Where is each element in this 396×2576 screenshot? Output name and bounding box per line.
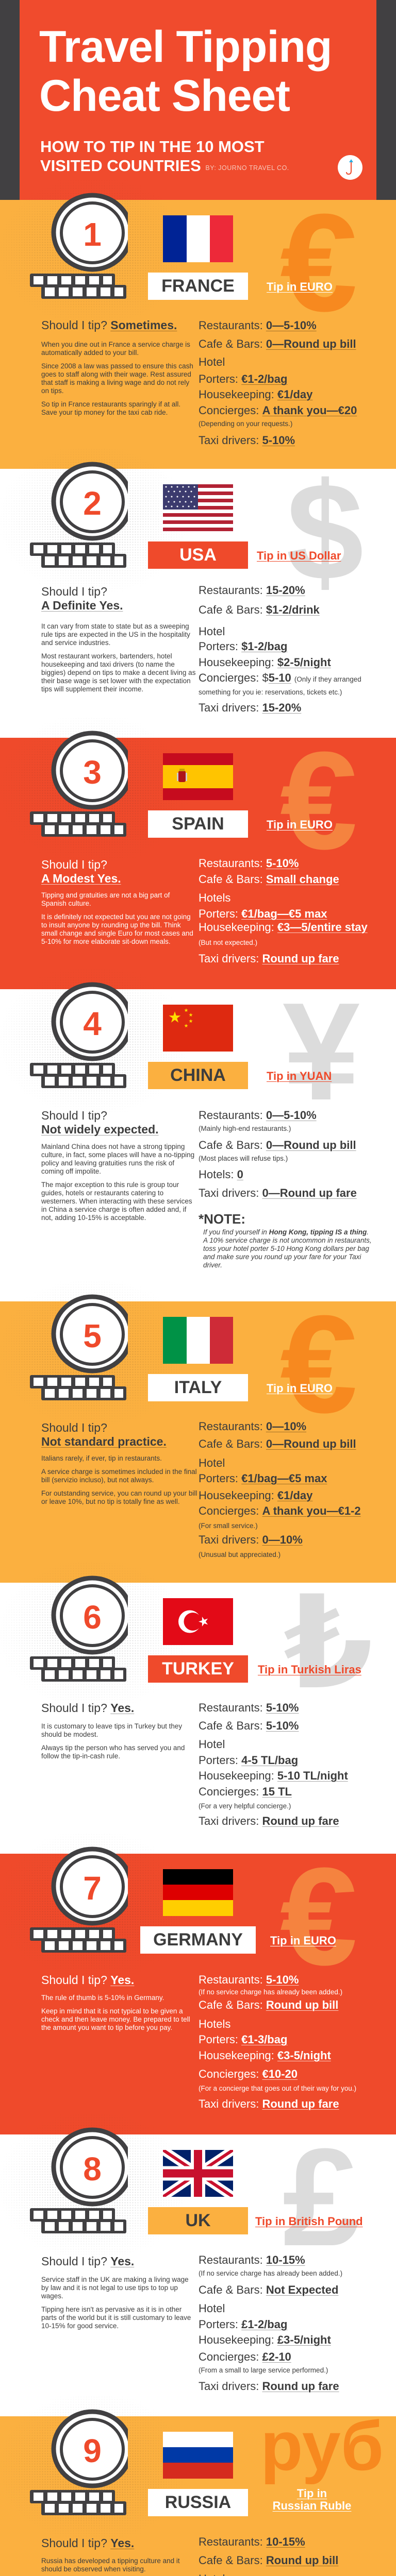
- panel: UK: Hotel: [199, 2302, 225, 2315]
- should I tip: [41, 858, 121, 885]
- panel: UK: Cafe & Bars: Not Expected: [199, 2283, 338, 2296]
- panel: France: Housekeeping: €1/day: [199, 388, 312, 401]
- tip currency: Tip in US Dollar: [257, 549, 341, 562]
- description: It is definitely not expected but you are not going to insult anyone by rounding up the bill. Think small change and single Euro for most cases and 5-10% for more elaborate sit-down meals.: [41, 913, 193, 945]
- should I tip: [41, 1109, 159, 1136]
- label: USA: [179, 545, 217, 565]
- flag: UK: [163, 2150, 233, 2197]
- icon: coin 8: [30, 2128, 128, 2233]
- panel: Italy: Porters: €1/bag—€5 max: [199, 1472, 327, 1485]
- panel: France: Taxi drivers: 5-10%: [199, 434, 295, 447]
- currency symbol euro: €: [280, 185, 357, 341]
- label: [148, 2207, 248, 2234]
- should I tip: A Definite Yes.: [41, 599, 123, 612]
- icon: coin 2: 2: [83, 485, 102, 522]
- description: The rule of thumb is 5-10% in Germany.: [41, 1994, 164, 2002]
- icon: coin 1: [30, 193, 128, 299]
- should I tip: Should I tip?: [41, 858, 107, 871]
- icon: coin 9: 9: [83, 2432, 102, 2469]
- panel: Turkey: Cafe & Bars: 5-10%: [199, 1719, 299, 1732]
- description: Since 2008 a law was passed to ensure this cash goes to staff along with their wage. Rest assured that staff is making a living wage and do not rely on tips.: [41, 362, 193, 395]
- description: [41, 1994, 190, 2031]
- panel: France: Concierges: A thank you—€20: [199, 404, 357, 417]
- tipping rates: [199, 1973, 356, 2110]
- panel: UK: Taxi drivers: Round up fare: [199, 2380, 339, 2393]
- should I tip: Should I tip? Yes.: [41, 1701, 134, 1715]
- icon: coin 2: [30, 462, 128, 568]
- panel: Italy: (Unusual but appreciated.): [199, 1551, 280, 1558]
- icon: coin 9: [29, 2409, 128, 2517]
- description: Service staff in the UK are making a living wage by law and it is not legal to use tips to top up wages.: [41, 2276, 189, 2300]
- panel: Italy: Cafe & Bars: 0—Round up bill: [199, 1437, 356, 1450]
- flag: Russia: [163, 2432, 233, 2479]
- description: [41, 341, 193, 416]
- panel: UK: Porters: £1-2/bag: [199, 2318, 287, 2331]
- panel: UK: (From a small to large service performed.): [199, 2366, 328, 2374]
- should I tip: Should I tip? Sometimes.: [41, 318, 177, 332]
- panel: Turkey: Taxi drivers: Round up fare: [199, 1815, 339, 1827]
- currency symbol yuan: ¥: [283, 974, 360, 1129]
- currency symbol euro: €: [280, 1287, 357, 1442]
- currency symbol lira: ₺: [284, 1568, 373, 1718]
- panel: USA: Restaurants: 15-20%: [199, 584, 305, 597]
- currency symbol euro: €: [280, 723, 357, 878]
- description: Always tip the person who has served you and follow the tip-in-cash rule.: [41, 1744, 185, 1760]
- description: A service charge is sometimes included in the final bill (servizio incluso), but not always.: [41, 1468, 197, 1484]
- panel: China: (Most places will refuse tips.): [199, 1155, 288, 1162]
- panel: Russia: Cafe & Bars: Round up bill: [199, 2554, 338, 2567]
- tipping rates: [0, 2134, 396, 2135]
- panel: UK: [11, 2123, 363, 2393]
- should I tip: Should I tip?: [41, 585, 107, 598]
- should I tip: Should I tip? Yes.: [41, 2536, 134, 2550]
- description: [41, 2276, 196, 2335]
- should I tip: A Modest Yes.: [41, 872, 121, 885]
- tipping rates: [199, 1420, 361, 1558]
- currency symbol ruble: руб: [260, 2407, 384, 2485]
- should I tip: [41, 585, 123, 612]
- flag: Turkey: [163, 1598, 233, 1645]
- flag: Spain: [163, 753, 233, 800]
- icon: coin 3: [30, 731, 128, 837]
- panel: UK: (If no service charge has already been added.): [199, 2269, 342, 2277]
- panel: China: [11, 978, 371, 1267]
- should I tip: Should I tip?: [41, 1109, 107, 1122]
- label: [148, 273, 248, 300]
- subtitle: [40, 138, 289, 175]
- panel: Italy: Housekeeping: €1/day: [199, 1489, 312, 1502]
- panel: Germany: Taxi drivers: Round up fare: [199, 2097, 339, 2110]
- description: The major exception to this rule is group tour guides, hotels or restaurants catering to westerners. When interacting with these services in China a service charge is often added and, if not, adding 10-15% is acceptable.: [41, 1181, 192, 1222]
- label: ITALY: [174, 1378, 222, 1397]
- label: SPAIN: [172, 814, 224, 834]
- panel: Germany: Hotels: [199, 2018, 230, 2030]
- header: [0, 0, 396, 200]
- description: Keep in mind that it is not typical to be given a check and then leave money. Be prepared to tell the amount you want to tip before you pay.: [41, 2007, 190, 2031]
- description: Russia has developed a tipping culture and it should be observed when visiting.: [41, 2557, 180, 2573]
- title: Travel Tipping: [39, 22, 332, 72]
- icon: coin 6: 6: [83, 1599, 102, 1636]
- description: [41, 1454, 197, 1505]
- flag: USA: [163, 484, 233, 531]
- tip currency: [268, 2487, 356, 2512]
- tipping rates: [199, 584, 361, 714]
- label: TURKEY: [162, 1659, 234, 1679]
- icon: coin 7: 7: [83, 1870, 102, 1907]
- tipping rates: [199, 319, 357, 447]
- description: Most restaurant workers, bartenders, hotel housekeeping and taxi drivers (to name the biggies) depend on tips to make a decent living as their base wage is set lower with the expectation tips will supplement their income.: [41, 652, 195, 693]
- tip currency: Tip in EURO: [267, 818, 333, 831]
- panel: France: Porters: €1-2/bag: [199, 372, 287, 385]
- panel: Spain: Porters: €1/bag—€5 max: [199, 907, 327, 920]
- panel: China: Cafe & Bars: 0—Round up bill: [199, 1139, 356, 1151]
- panel: France: Cafe & Bars: 0—Round up bill: [199, 337, 356, 350]
- panel: France: (Depending on your requests.): [199, 420, 292, 428]
- label: RUSSIA: [165, 2493, 231, 2512]
- tipping rates: [0, 2416, 396, 2417]
- description: Mainland China does not have a strong tipping culture, in fact, some places will have a no-tipping policy and leaving gratuities runs the risk of coming off impolite.: [41, 1143, 194, 1175]
- tipping rates: [199, 857, 368, 965]
- callout: Hong Kong note: If you find yourself in Hong Kong, tipping IS a thing. A 10% service charge is not uncommon in restaurants, toss your hotel porter 5-10 Hong Kong dollars per bag and make sure you round up your fare for your Taxi driver.: [203, 1228, 372, 1269]
- panel: Germany: (For a concierge that goes out of their way for you.): [199, 2084, 356, 2092]
- label: [148, 1655, 248, 1683]
- currency symbol dollar: $: [286, 454, 364, 609]
- icon: coin 6: [30, 1575, 128, 1682]
- panel: Germany: Cafe & Bars: Round up bill: [199, 1998, 338, 2011]
- panel: Italy: (For small service.): [199, 1522, 258, 1530]
- panel: China: Restaurants: 0—5-10%: [199, 1109, 317, 1122]
- title: [39, 22, 332, 121]
- panel: USA: Hotel: [199, 625, 225, 638]
- should I tip: Should I tip?: [41, 1421, 107, 1434]
- tipping rates: [199, 1109, 357, 1199]
- icon: coin 5: 5: [83, 1317, 102, 1354]
- tip currency: Tip in EURO: [270, 1934, 336, 1947]
- description: [41, 891, 193, 945]
- icon: coin 7: [30, 1846, 128, 1953]
- should I tip: [41, 1421, 167, 1448]
- panel: Italy: [0, 1301, 396, 1583]
- panel: France: Restaurants: 0—5-10%: [199, 319, 317, 332]
- panel: USA: Taxi drivers: 15-20%: [199, 701, 301, 714]
- icon: journo logo: [338, 155, 362, 180]
- label: [140, 1926, 256, 1954]
- callout: Hong Kong note: [199, 1211, 372, 1269]
- label: [148, 810, 248, 838]
- panel: UK: Concierges: £2-10: [199, 2350, 291, 2363]
- tip currency: Tip in EURO: [267, 1382, 333, 1395]
- description: [41, 622, 195, 693]
- panel: Spain: Housekeeping: €3—5/entire stay: [199, 921, 368, 934]
- tipping rates: [199, 1701, 348, 1827]
- description: When you dine out in France a service charge is automatically added to your bill.: [41, 341, 190, 357]
- panel: USA: something for you ie: reservations, tickets etc.): [199, 688, 342, 696]
- panel: France: Hotel: [199, 355, 225, 368]
- should I tip: Not standard practice.: [41, 1435, 167, 1448]
- currency symbol euro: €: [280, 1839, 357, 1994]
- panel: Spain: Taxi drivers: Round up fare: [199, 952, 339, 965]
- panel: Italy: Concierges: A thank you—€1-2: [199, 1504, 361, 1517]
- tip currency: Tip in British Pound: [255, 2215, 363, 2228]
- label: GERMANY: [153, 1930, 243, 1950]
- panel: Turkey: Restaurants: 5-10%: [199, 1701, 299, 1714]
- icon: coin 8: 8: [83, 2150, 102, 2188]
- tip currency: Russian Ruble: [273, 2499, 351, 2512]
- icon: coin 5: [30, 1294, 128, 1400]
- tip currency: Tip in EURO: [267, 280, 333, 293]
- panel: France: [0, 200, 396, 469]
- icon: coin 3: 3: [83, 754, 102, 791]
- panel: Russia: [0, 2416, 396, 2576]
- should I tip: Should I tip? Yes.: [41, 2255, 134, 2268]
- label: [148, 2489, 248, 2516]
- panel: USA: Concierges: $5-10 (Only if they arranged: [199, 671, 361, 684]
- currency symbol pound: £: [283, 2120, 360, 2275]
- panel: USA: Porters: $1-2/bag: [199, 640, 287, 653]
- panel: Spain: (But not expected.): [199, 939, 257, 946]
- panel: Italy: Taxi drivers: 0—10%: [199, 1533, 303, 1546]
- subtitle: VISITED COUNTRIES BY: JOURNO TRAVEL CO.: [40, 157, 289, 175]
- panel: Spain: [0, 738, 396, 989]
- panel: Russia: Restaurants: 10-15%: [199, 2535, 305, 2548]
- description: [41, 1722, 185, 1760]
- panel: China: Hotels: 0: [199, 1168, 243, 1181]
- label: UK: [185, 2211, 211, 2230]
- panel: Germany: Concierges: €10-20: [199, 2067, 298, 2080]
- panel: Italy: Hotel: [199, 1456, 225, 1469]
- panel: Turkey: Housekeeping: 5-10 TL/night: [199, 1769, 348, 1782]
- panel: Turkey: Porters: 4-5 TL/bag: [199, 1754, 298, 1767]
- tip currency: Tip in: [297, 2487, 327, 2500]
- label: [148, 1062, 248, 1089]
- label: [148, 1374, 248, 1401]
- label: CHINA: [170, 1065, 226, 1085]
- subtitle: HOW TO TIP IN THE 10 MOST: [40, 138, 265, 156]
- panel: Germany: [0, 1854, 396, 2134]
- panel: Germany: Porters: €1-3/bag: [199, 2033, 287, 2046]
- panel: Germany: Housekeeping: €3-5/night: [199, 2049, 331, 2062]
- description: Tipping and gratuities are not a big part of Spanish culture.: [41, 891, 170, 907]
- should I tip: Should I tip? Yes.: [41, 1973, 134, 1987]
- tip currency: Tip in Turkish Liras: [258, 1663, 361, 1676]
- panel: Germany: Restaurants: 5-10%: [199, 1973, 299, 1986]
- panel: USA: [11, 457, 362, 714]
- panel: Turkey: (For a very helpful concierge.): [199, 1802, 291, 1810]
- panel: Spain: Hotels: [199, 891, 230, 904]
- label: [148, 541, 248, 569]
- title: Cheat Sheet: [39, 71, 290, 121]
- description: Tipping here isn't as pervasive as it is in other parts of the world but it is still customary to leave 10-15% for good service.: [41, 2306, 191, 2330]
- description: For outstanding service, you can round up your bill or leave 10%, but no tip is totally fine as well.: [41, 1489, 197, 1505]
- panel: Turkey: [11, 1571, 370, 1827]
- description: So tip in France restaurants sparingly if at all. Save your tip money for the taxi cab ride.: [41, 400, 180, 416]
- panel: China: (Mainly high-end restaurants.): [199, 1125, 291, 1132]
- tip currency: Tip in YUAN: [267, 1070, 332, 1082]
- flag: France: [163, 215, 233, 262]
- should I tip: Not widely expected.: [41, 1123, 159, 1136]
- panel: Italy: Restaurants: 0—10%: [199, 1420, 306, 1433]
- description: It is customary to leave tips in Turkey but they should be modest.: [41, 1722, 182, 1738]
- label: FRANCE: [161, 276, 235, 296]
- icon: coin 4: 4: [83, 1005, 102, 1042]
- panel: USA: Housekeeping: $2-5/night: [199, 656, 331, 669]
- panel: USA: Cafe & Bars: $1-2/drink: [199, 603, 320, 616]
- panel: Spain: Restaurants: 5-10%: [199, 857, 299, 870]
- panel: Spain: Cafe & Bars: Small change: [199, 873, 339, 886]
- panel: Turkey: Hotel: [199, 1738, 225, 1751]
- panel: Turkey: Concierges: 15 TL: [199, 1785, 292, 1798]
- panel: China: Taxi drivers: 0—Round up fare: [199, 1187, 357, 1199]
- panel: UK: Restaurants: 10-15%: [199, 2253, 305, 2266]
- description: Italians rarely, if ever, tip in restaurants.: [41, 1454, 162, 1462]
- flag: Germany: [163, 1869, 233, 1916]
- flag: China: [163, 1005, 233, 1052]
- description: [41, 1143, 194, 1222]
- panel: UK: Housekeeping: £3-5/night: [199, 2333, 331, 2346]
- flag: Italy: [163, 1317, 233, 1364]
- callout: Hong Kong note: *NOTE:: [199, 1211, 245, 1227]
- description: It can vary from state to state but as a sweeping rule tips are expected in the US in the hospitality and service industries.: [41, 622, 190, 647]
- panel: Germany: (If no service charge has already been added.): [199, 1988, 342, 1996]
- icon: coin 1: 1: [83, 216, 102, 253]
- icon: coin 4: [30, 982, 128, 1088]
